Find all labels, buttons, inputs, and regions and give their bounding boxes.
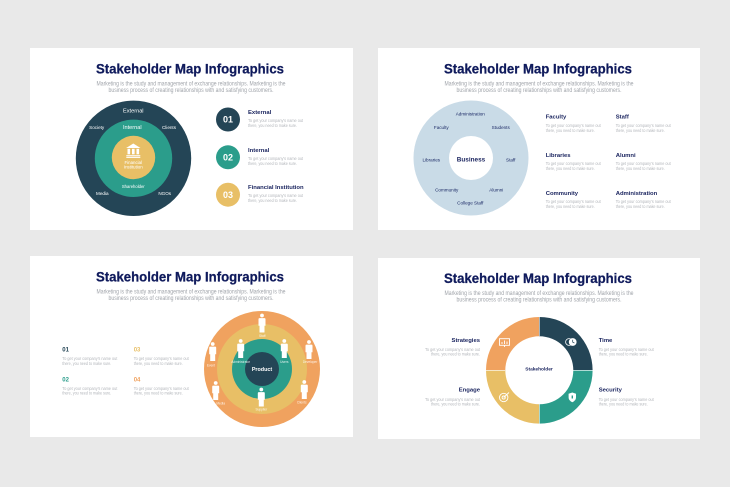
product circle diagram: Users: [280, 360, 289, 364]
product circle diagram: Administrator: [231, 360, 251, 364]
text: 01: 01: [62, 348, 70, 354]
ring diagram: College Staff: [457, 200, 484, 206]
text: 02: [62, 378, 118, 396]
text: 03: there, you need to make sure.: [134, 361, 183, 366]
text: 04: To get your company's name out: [134, 386, 189, 391]
legend 03 Financial Institution: [216, 183, 304, 207]
text: Staff: [616, 114, 671, 133]
panel: top-left nested circles: [30, 48, 353, 230]
subtitle: Marketing is the study and management of exchange relationships. Marketing is the: [444, 82, 634, 88]
product circle diagram: Developer: [303, 360, 318, 364]
legend 02 Internal: Internal: [248, 148, 270, 154]
nested circle diagram: Financial: [125, 160, 142, 165]
panel: top-right business ring: [378, 48, 700, 230]
text: Time: [599, 338, 654, 356]
icons: stakeholder figures: [209, 314, 312, 406]
text: Community: there, you need to make sure.: [546, 204, 595, 209]
subtitle: Marketing is the study and management of exchange relationships. Marketing is the: [444, 291, 634, 297]
subtitle: [444, 82, 634, 94]
legend 02 Internal: To get your company's name out: [248, 156, 304, 161]
legend 03 Financial Institution: To get your company's name out: [248, 193, 304, 198]
product circle diagram: Media: [216, 402, 225, 406]
subtitle: business process of creating relationships with and satisfying customers.: [456, 88, 622, 94]
text: Faculty: [546, 114, 601, 133]
ring diagram: Faculty: [434, 125, 449, 130]
subtitle: business process of creating relationships with and satisfying customers.: [108, 88, 274, 94]
text: 04: 04: [134, 378, 141, 384]
text: Administration: To get your company's name out: [616, 199, 671, 204]
text: Alumni: there, you need to make sure.: [616, 166, 665, 171]
text: 03: [134, 348, 189, 366]
icon: chart board: [500, 339, 510, 347]
text: 01: there, you need to make sure.: [62, 361, 111, 366]
ring diagram: Libraries: [422, 158, 441, 162]
text: Community: [546, 191, 601, 209]
nested circle diagram: NGOs: [158, 191, 172, 196]
nested circle diagram: Shareholder: [122, 184, 145, 189]
text: Libraries: To get your company's name out: [546, 161, 601, 166]
text: Administration: there, you need to make sure.: [616, 204, 665, 209]
icon: bank building: [126, 144, 140, 158]
subtitle: Marketing is the study and management of exchange relationships. Marketing is the: [96, 82, 286, 88]
nested circle diagram: Institution: [124, 165, 143, 170]
text: Time: Time: [599, 338, 613, 344]
text: Strategies: Strategies: [452, 338, 481, 344]
text: 03: 03: [134, 348, 141, 354]
legend 02 Internal: [216, 145, 304, 169]
nested circle diagram: Society: [89, 125, 105, 130]
text: Alumni: [616, 153, 671, 171]
text: Libraries: there, you need to make sure.: [546, 166, 595, 171]
subtitle: [444, 291, 634, 304]
ring diagram: Alumni: [489, 188, 503, 192]
text: Alumni: To get your company's name out: [616, 161, 671, 166]
text: Engage: there, you need to make sure.: [431, 402, 480, 406]
product circle diagram: Clients: [297, 400, 307, 404]
product circle diagram: Product: [252, 367, 272, 373]
ring diagram: Administration: [456, 111, 485, 116]
text: Staff: Staff: [616, 114, 629, 120]
text: Engage: Engage: [459, 388, 481, 394]
legend 01 External: there, you need to make sure.: [248, 123, 297, 128]
text: Engage: To get your company's name out: [425, 397, 481, 402]
title: Stakeholder Map Infographics: [96, 62, 284, 76]
product circle diagram: Supplier: [255, 408, 268, 412]
legend 03 Financial Institution: Financial Institution: [248, 185, 304, 191]
text: Strategies: To get your company's name out: [425, 347, 481, 352]
text: Security: [599, 388, 654, 406]
text: Community: Community: [546, 191, 579, 197]
icon: target with arrow: [500, 392, 509, 402]
icon: shield: [569, 392, 576, 402]
donut chart: [485, 316, 593, 424]
ring diagram: Staff: [506, 158, 516, 162]
panel: bottom-left product circles: [30, 256, 353, 437]
text: Faculty: To get your company's name out: [546, 123, 601, 128]
ring diagram: [414, 100, 528, 216]
subtitle: Marketing is the study and management of exchange relationships. Marketing is the: [96, 290, 286, 296]
text: Administration: [616, 191, 671, 209]
title: Stakeholder Map Infographics: [96, 270, 284, 284]
text: Libraries: Libraries: [546, 153, 571, 159]
text: 02: there, you need to make sure.: [62, 391, 111, 396]
text: Faculty: there, you need to make sure.: [546, 128, 595, 133]
nested circle diagram: Media: [96, 191, 109, 196]
ring diagram: Community: [435, 188, 459, 192]
text: 03: To get your company's name out: [134, 356, 189, 361]
title: Stakeholder Map Infographics: [444, 271, 632, 286]
text: Security: there, you need to make sure.: [599, 402, 648, 406]
text: Staff: To get your company's name out: [616, 123, 671, 128]
text: 04: there, you need to make sure.: [134, 391, 183, 396]
text: Administration: Administration: [616, 191, 658, 197]
subtitle: business process of creating relationships with and satisfying customers.: [108, 296, 274, 302]
legend 01 External: To get your company's name out: [248, 118, 304, 123]
product circle diagram: Event: [207, 364, 215, 368]
nested circle diagram: Internal: [123, 125, 142, 131]
text: 04: [134, 378, 189, 396]
product circle diagram: [204, 311, 320, 427]
text: Engage: [425, 388, 481, 406]
nested circle diagram: [76, 101, 191, 216]
text: Staff: there, you need to make sure.: [616, 128, 665, 133]
text: Alumni: Alumni: [616, 153, 636, 159]
text: Strategies: there, you need to make sure.: [431, 352, 480, 356]
subtitle: [96, 82, 286, 94]
subtitle: [96, 290, 286, 302]
legend 03 Financial Institution: there, you need to make sure.: [248, 198, 297, 203]
text: Security: Security: [599, 388, 623, 394]
nested circle diagram: Clients: [162, 125, 177, 130]
nested circle diagram: External: [123, 108, 144, 114]
text: Time: there, you need to make sure.: [599, 352, 648, 356]
legend 03 Financial Institution: 03: [223, 190, 233, 200]
panel: bottom-right stakeholder donut: [378, 258, 700, 439]
ring diagram: Students: [492, 125, 510, 130]
text: Strategies: [425, 338, 481, 356]
title: Stakeholder Map Infographics: [444, 62, 632, 76]
text: 01: To get your company's name out: [62, 356, 118, 361]
text: Faculty: Faculty: [546, 114, 567, 120]
product circle diagram: Staff: [259, 334, 266, 338]
subtitle: business process of creating relationships with and satisfying customers.: [456, 298, 622, 304]
text: 02: To get your company's name out: [62, 386, 118, 391]
ring diagram: Business: [457, 156, 486, 163]
legend 01 External: 01: [223, 115, 233, 125]
donut chart: Stakeholder: [525, 367, 553, 373]
legend 02 Internal: 02: [223, 152, 233, 162]
text: 01: [62, 348, 118, 366]
legend 02 Internal: there, you need to make sure.: [248, 161, 297, 166]
text: Security: To get your company's name out: [599, 397, 654, 402]
legend 01 External: External: [248, 110, 272, 116]
legend 01 External: [216, 108, 304, 132]
icon: clock and coins: [566, 338, 577, 346]
text: 02: 02: [62, 378, 70, 384]
text: Time: To get your company's name out: [599, 347, 654, 352]
text: Libraries: [546, 153, 601, 171]
text: Community: To get your company's name out: [546, 199, 601, 204]
